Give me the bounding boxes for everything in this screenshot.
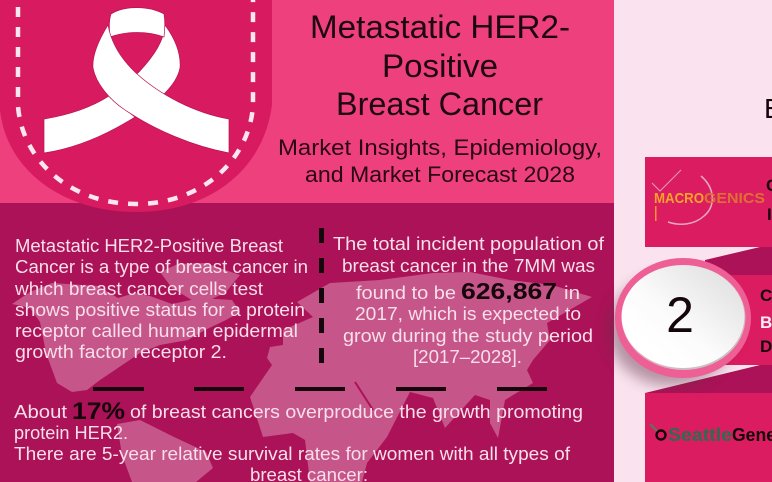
shield badge bbox=[0, 0, 272, 212]
band text fragment: D bbox=[760, 337, 772, 356]
text block: definition: growth factor receptor 2. bbox=[15, 342, 227, 362]
text block: definition: which breast cancer cells test bbox=[14, 279, 263, 299]
company text fragment: I bbox=[767, 205, 772, 224]
band text fragment: B bbox=[760, 313, 772, 332]
panel: ribbon fold and number band bbox=[645, 247, 772, 393]
vertical dashed divider bbox=[319, 228, 324, 363]
logo: Seattle Genetics bbox=[650, 424, 772, 445]
horizontal dashed divider bbox=[93, 387, 547, 391]
text block: overproduction and survival: There are 5-year relative survival rates for women with all types of bbox=[14, 444, 571, 464]
stitched dashed outline bbox=[18, 0, 253, 204]
subtitle bbox=[278, 135, 602, 187]
text block: incident population: grow during the study period bbox=[343, 326, 593, 346]
text block: incident population: [2017–2028]. bbox=[413, 347, 522, 367]
text block: incident population: 2017, which is expected to bbox=[355, 304, 581, 324]
text block: overproduction and survival: of breast cancers overproduce the growth promoting bbox=[130, 402, 583, 422]
logo: MacroGenics: GENICS bbox=[704, 190, 765, 207]
text block: overproduction and survival bbox=[14, 398, 583, 482]
panel: Seattle Genetics company bbox=[645, 393, 772, 482]
text block: definition: Cancer is a type of breast cancer in bbox=[15, 257, 308, 277]
company text fragment bbox=[766, 176, 772, 224]
circle shadow bbox=[608, 274, 736, 386]
text block: overproduction and survival: protein HER2. bbox=[14, 423, 128, 443]
panel: MacroGenics company bbox=[645, 157, 772, 247]
panel: dark insights background bbox=[0, 203, 614, 482]
logo: MacroGenics: MACRO bbox=[654, 190, 704, 207]
world map bbox=[12, 263, 592, 482]
band text fragment: C bbox=[760, 286, 772, 305]
band text fragment bbox=[760, 286, 772, 356]
icon: awareness ribbon bbox=[44, 8, 229, 153]
text block: definition bbox=[14, 236, 308, 362]
text block: definition: shows positive status for a protein bbox=[15, 300, 305, 320]
number badge: 2 bbox=[615, 258, 751, 378]
logo: MacroGenics bbox=[652, 170, 765, 224]
text block: overproduction and survival: About bbox=[14, 402, 67, 422]
title: Breast Cancer bbox=[336, 86, 543, 122]
text block: incident population: in bbox=[564, 283, 580, 303]
number: 626,867: 626,867 bbox=[461, 278, 557, 304]
text block: definition: Metastatic HER2-Positive Breast bbox=[15, 236, 283, 256]
title bbox=[310, 9, 570, 122]
panel: header background bbox=[0, 0, 614, 203]
text block: incident population bbox=[333, 234, 605, 367]
panel: right companies background bbox=[614, 0, 772, 482]
subtitle: and Market Forecast 2028 bbox=[305, 162, 575, 187]
number: 17%: 17% bbox=[72, 398, 125, 425]
text block: incident population: The total incident population of bbox=[333, 234, 605, 254]
subtitle: Market Insights, Epidemiology, bbox=[278, 135, 602, 160]
title: Positive bbox=[382, 48, 498, 84]
number badge: 2: 2 bbox=[666, 287, 694, 343]
text block: incident population: breast cancer in the 7MM was bbox=[342, 256, 595, 276]
text block: definition: receptor called human epidermal bbox=[15, 321, 298, 341]
text block: incident population: found to be bbox=[356, 283, 456, 303]
logo: Seattle Genetics: Seattle bbox=[668, 425, 732, 445]
title: Metastatic HER2- bbox=[310, 9, 570, 45]
